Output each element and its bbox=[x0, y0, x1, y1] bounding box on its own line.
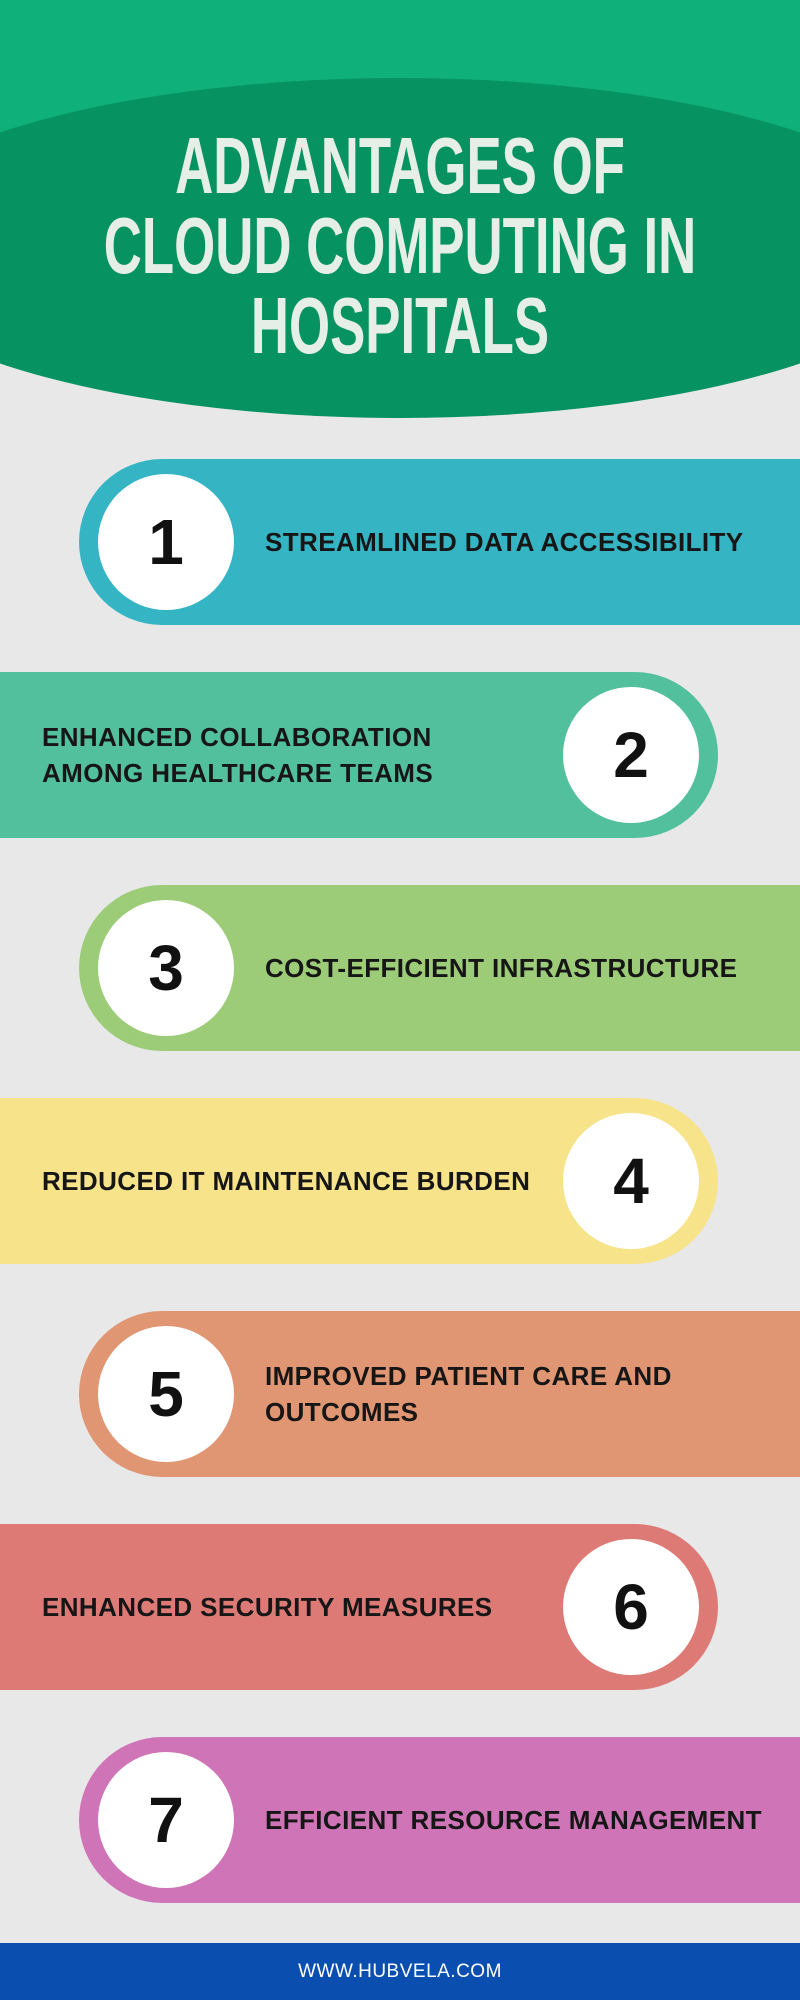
item 5: OUTCOMES bbox=[265, 1397, 418, 1427]
item 2: AMONG HEALTHCARE TEAMS bbox=[42, 758, 433, 788]
item 7 bbox=[79, 1737, 800, 1903]
item 5: IMPROVED PATIENT CARE AND bbox=[265, 1361, 672, 1391]
item 2 bbox=[0, 672, 718, 838]
item 7: EFFICIENT RESOURCE MANAGEMENT bbox=[265, 1805, 762, 1835]
item 4: REDUCED IT MAINTENANCE BURDEN bbox=[42, 1166, 530, 1196]
item 4 bbox=[0, 1098, 718, 1264]
item 3 bbox=[79, 885, 800, 1051]
item 3: 3 bbox=[148, 932, 184, 1004]
item 6 bbox=[0, 1524, 718, 1690]
title: CLOUD COMPUTING IN bbox=[104, 201, 696, 290]
item 4: 4 bbox=[613, 1145, 649, 1217]
title bbox=[104, 121, 696, 370]
item 6: 6 bbox=[613, 1571, 649, 1643]
item 7: 7 bbox=[148, 1784, 184, 1856]
footer: WWW.HUBVELA.COM bbox=[298, 1961, 502, 1982]
item 1 bbox=[79, 459, 800, 625]
item 2: ENHANCED COLLABORATION bbox=[42, 722, 432, 752]
title: HOSPITALS bbox=[251, 281, 549, 370]
header background bbox=[0, 0, 800, 418]
item 6: ENHANCED SECURITY MEASURES bbox=[42, 1592, 493, 1622]
footer bbox=[0, 1943, 800, 2000]
item 1: STREAMLINED DATA ACCESSIBILITY bbox=[265, 527, 744, 557]
item 5: 5 bbox=[148, 1358, 184, 1430]
item 5 bbox=[79, 1311, 800, 1477]
item 3: COST-EFFICIENT INFRASTRUCTURE bbox=[265, 953, 737, 983]
item 1: 1 bbox=[148, 506, 184, 578]
title: ADVANTAGES OF bbox=[175, 121, 625, 210]
item 2: 2 bbox=[613, 719, 649, 791]
